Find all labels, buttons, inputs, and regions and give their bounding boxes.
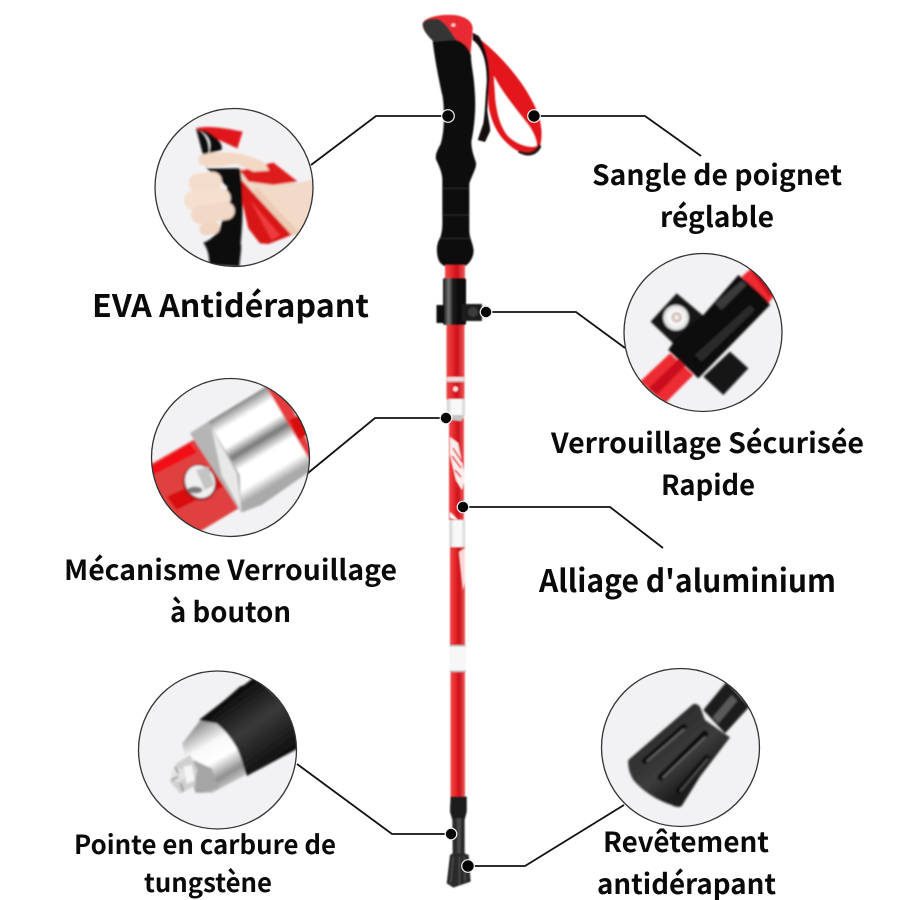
red cap xyxy=(196,127,243,148)
palm xyxy=(240,168,317,237)
leader line: strap xyxy=(534,116,701,156)
label: tungsten tip xyxy=(74,825,336,900)
shaft upper xyxy=(445,265,465,280)
label: wrist strap: réglable xyxy=(660,196,774,236)
label: quick lock: Rapide xyxy=(661,464,755,504)
circle: quick lock xyxy=(624,254,782,412)
fingers xyxy=(198,152,269,172)
foot xyxy=(628,704,730,807)
leader line: button xyxy=(308,418,446,473)
trekking pole xyxy=(423,15,542,888)
tip xyxy=(170,755,198,793)
grooves xyxy=(645,727,684,761)
leader line: grip xyxy=(311,116,448,165)
body xyxy=(668,275,770,378)
bolt xyxy=(663,305,689,330)
circle: tungsten carbide tip xyxy=(138,671,302,829)
lower tab xyxy=(703,352,748,395)
label: button mechanism xyxy=(64,549,397,631)
leader line: aluminium xyxy=(463,507,663,548)
silver cone xyxy=(182,721,246,793)
leader line: lock xyxy=(486,312,625,348)
black body xyxy=(199,677,302,776)
label: button mechanism: à bouton xyxy=(170,591,291,631)
clamp plate xyxy=(650,292,704,344)
label: EVA grip: EVA Antidérapant xyxy=(92,281,369,326)
red strap xyxy=(240,163,298,185)
label: wrist strap: Sangle de poignet xyxy=(592,154,842,194)
label: rubber cover xyxy=(597,821,776,900)
leader line: rubber cover xyxy=(468,805,624,866)
pole ferrule and foot xyxy=(447,797,471,888)
button xyxy=(182,463,218,502)
red tube right xyxy=(265,388,309,460)
label: button mechanism: Mécanisme Verrouillage xyxy=(64,549,397,589)
shaft xyxy=(703,682,749,733)
red tube bottom xyxy=(640,353,693,403)
wrist strap xyxy=(472,33,542,156)
handle xyxy=(196,128,243,267)
label: quick lock: Verrouillage Sécurisée xyxy=(550,422,864,462)
leader line: tungsten tip xyxy=(297,764,451,834)
grip and top cap xyxy=(423,15,476,267)
circle: rubber foot xyxy=(602,668,760,826)
red tube left xyxy=(147,439,238,535)
decals and collars xyxy=(447,377,466,672)
lock clamp xyxy=(436,278,482,325)
circle: button mechanism xyxy=(147,378,313,536)
red tube top xyxy=(742,267,777,305)
label: tungsten tip: Pointe en carbure de xyxy=(74,825,336,862)
marker dots xyxy=(440,110,540,872)
label: quick lock xyxy=(550,422,864,504)
label: tungsten tip: tungstène xyxy=(144,863,272,900)
label: wrist strap xyxy=(592,154,842,236)
label: aluminium: Alliage d'aluminium xyxy=(538,556,836,601)
shaft lower xyxy=(449,418,464,520)
metal collar xyxy=(207,386,309,513)
label: rubber cover: Revêtement xyxy=(603,821,769,861)
circle: hand on grip xyxy=(155,108,317,267)
